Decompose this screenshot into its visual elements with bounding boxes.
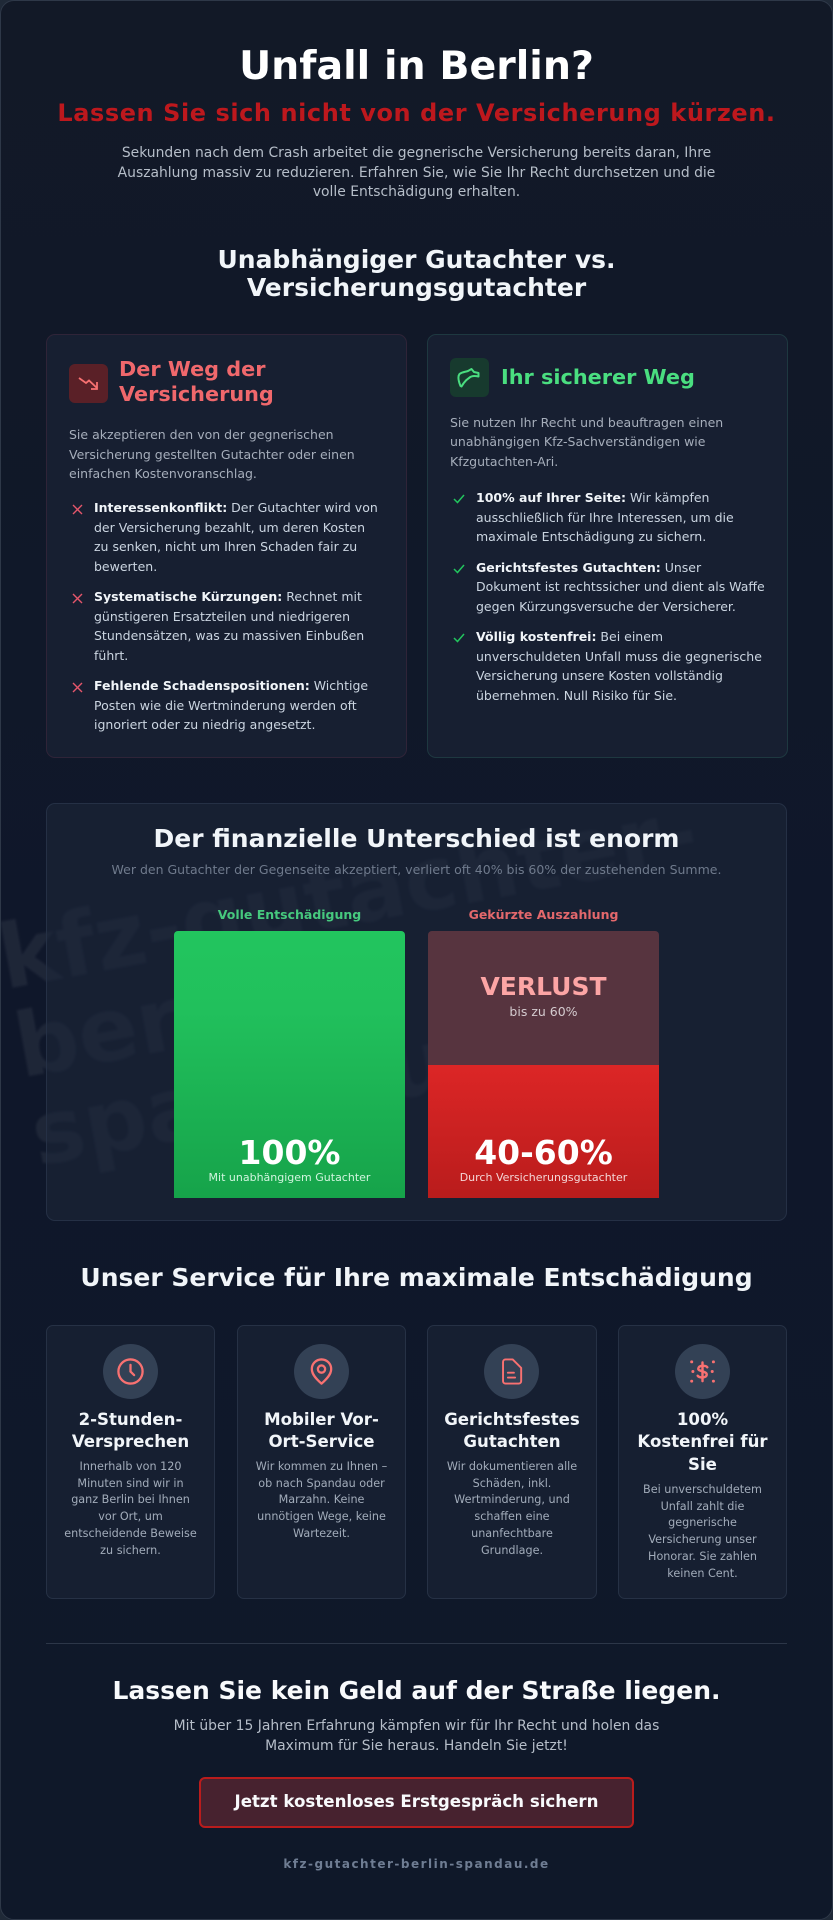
value: loss: VERLUST (480, 972, 607, 1001)
intro text: volle Entschädigung erhalten. (313, 184, 520, 200)
description: safe path: Sie nutzen Ihr Recht und beauftragen einen (450, 414, 723, 430)
description: safe path: Kfzgutachten-Ari. (450, 454, 558, 468)
card text: Unfall zahlt die (661, 1500, 744, 1513)
item: free of charge: übernehmen. Null Risiko für Sie. (476, 688, 677, 702)
item: free of charge: unverschuldeten Unfall muss die gegnerische (476, 648, 762, 664)
item: conflict of interest: Interessenkonflikt: Der Gutachter wird von (94, 500, 378, 515)
footer url: kfz-gutachter-berlin-spandau.de (283, 1857, 550, 1871)
watermark (0, 779, 705, 1187)
intro text (118, 145, 715, 200)
card text: Minuten sind wir in (77, 1477, 184, 1490)
item: systematic cuts: führt. (94, 648, 128, 662)
financial subtext: Wer den Gutachter der Gegenseite akzeptiert, verliert oft 40% bis 60% der zustehenden Summe. (112, 862, 721, 877)
card title: 2-Stunden- (79, 1410, 182, 1429)
card text (64, 1460, 197, 1557)
card text: Wertminderung, und (454, 1493, 570, 1506)
icon: check 1 (454, 494, 464, 504)
item: systematic cuts: Stundensätzen, was zu massiven Einbußen (94, 628, 364, 643)
icon: document (484, 1344, 539, 1399)
card title (637, 1410, 768, 1474)
service card: free (618, 1325, 787, 1599)
card text: Wartezeit. (293, 1527, 350, 1540)
service card: 2 hours (46, 1325, 215, 1599)
watermark: spandau.de (23, 980, 611, 1187)
item: missing items: Fehlende Schadenspositionen: Wichtige (94, 678, 368, 693)
service heading: Unser Service für Ihre maximale Entschädigung (80, 1263, 753, 1292)
item: missing items (94, 678, 368, 732)
card text: Bei unverschuldetem (643, 1483, 762, 1496)
card title: Kostenfrei für (637, 1432, 768, 1451)
card title (72, 1410, 189, 1451)
heading: insurance path (119, 357, 274, 406)
call to action text (174, 1718, 659, 1754)
item: free of charge (476, 629, 762, 702)
item: missing items: Posten wie die Wertminderung werden oft (94, 698, 357, 712)
bar chart: reduced payout (428, 907, 659, 1198)
card text (256, 1460, 387, 1540)
bar label: full: Volle Entschädigung (218, 907, 361, 922)
intro text: Auszahlung massiv zu reduzieren. Erfahren Sie, wie Sie Ihr Recht durchsetzen und die (118, 164, 715, 180)
card title: Mobiler Vor- (264, 1410, 379, 1429)
item: free of charge: Versicherung unsere Kosten vollständig (476, 668, 723, 683)
description: insurance path: Versicherung gestellten Gutachter oder einen (69, 446, 355, 462)
icon: check 2 (454, 564, 464, 574)
subtitle: Lassen Sie sich nicht von der Versicherung kürzen. (57, 99, 776, 127)
card text: unnötigen Wege, keine (257, 1510, 386, 1523)
card text (643, 1483, 762, 1580)
description: safe path (450, 414, 723, 468)
icon: check 3 (454, 634, 464, 642)
card title: Ort-Service (268, 1432, 375, 1451)
bar label: reduced: Gekürzte Auszahlung (469, 907, 618, 922)
card title: Versprechen (72, 1432, 189, 1451)
item: on your side: ausschließlich für Ihre Interessen, um die (476, 510, 734, 524)
icon: map pin (294, 1344, 348, 1399)
bar chart: full compensation (174, 907, 405, 1198)
service card: court-proof (427, 1325, 597, 1599)
description: insurance path: Sie akzeptieren den von der gegnerischen (69, 427, 334, 442)
icon: cross 1 (72, 504, 82, 514)
item: systematic cuts (94, 589, 364, 662)
icon: cross 3 (72, 682, 82, 692)
service card: on-site (237, 1325, 406, 1599)
item: systematic cuts: günstigeren Ersatzteilen und niedrigeren (94, 608, 350, 624)
item: conflict of interest: der Versicherung bezahlt, um deren Kosten (94, 520, 365, 534)
panel: insurance path (46, 334, 407, 758)
card text: unanfechtbare (471, 1527, 553, 1540)
financial heading: Der finanzielle Unterschied ist enorm (154, 824, 679, 853)
value: 40-60%: 40-60% (474, 1133, 613, 1172)
icon: dollar sparkle (674, 1344, 730, 1399)
card text: entscheidende Beweise (64, 1527, 197, 1540)
card text: Grundlage. (481, 1544, 543, 1557)
comparison heading (217, 245, 616, 302)
comparison heading: Unabhängiger Gutachter vs. (217, 245, 616, 274)
item: systematic cuts: Systematische Kürzungen: Rechnet mit (94, 589, 362, 604)
call to action button: Jetzt kostenloses Erstgespräch sichern (234, 1792, 598, 1811)
card text: vor Ort, um (98, 1510, 163, 1523)
item: conflict of interest (94, 500, 378, 574)
icon: cross 2 (72, 594, 82, 604)
icon: rising arrow (450, 358, 489, 397)
panel: financial difference (46, 803, 787, 1221)
card text: Versicherung unser (648, 1533, 757, 1546)
card text: Schäden, inkl. (473, 1477, 551, 1490)
icon: trending down (69, 364, 108, 403)
heading: insurance path: Versicherung (119, 382, 274, 406)
item: court-proof report (476, 560, 765, 614)
title: Unfall in Berlin? (239, 43, 594, 89)
card text (447, 1460, 577, 1557)
description: safe path: unabhängigen Kfz-Sachverständigen wie (450, 434, 705, 449)
card text: zu sichern. (100, 1544, 161, 1557)
item: court-proof report: gegen Kürzungsversuche der Versicherer. (476, 598, 736, 614)
item: conflict of interest: zu senken, nicht um Ihren Schaden fair zu (94, 539, 357, 554)
card title (264, 1410, 379, 1451)
card text: Marzahn. Keine (279, 1493, 364, 1506)
list: safe path benefits (454, 490, 765, 702)
item: conflict of interest: bewerten. (94, 558, 157, 574)
bar segment: loss (428, 931, 659, 1065)
card title: Gutachten (463, 1432, 561, 1451)
card title: Sie (688, 1455, 717, 1474)
card title: Gerichtsfestes (444, 1410, 580, 1429)
card text: Wir kommen zu Ihnen – (256, 1460, 387, 1473)
item: on your side (476, 490, 734, 544)
call to action button (199, 1777, 634, 1828)
caption: with independent expert: Mit unabhängigem Gutachter (209, 1171, 370, 1184)
card text: Innerhalb von 120 (80, 1460, 181, 1473)
item: court-proof report: Dokument ist rechtssicher und dient als Waffe (476, 579, 765, 594)
item: on your side: 100% auf Ihrer Seite: Wir kämpfen (476, 490, 709, 505)
card text: Wir dokumentieren alle (447, 1460, 577, 1473)
call to action heading: Lassen Sie kein Geld auf der Straße liegen. (112, 1676, 721, 1705)
card text: ob nach Spandau oder (258, 1477, 385, 1490)
bar: 100 percent (174, 931, 405, 1198)
item: missing items: ignoriert oder zu niedrig angesetzt. (94, 717, 315, 732)
heading: safe path: Ihr sicherer Weg (501, 365, 695, 389)
item: on your side: maximale Entschädigung zu sichern. (476, 529, 706, 544)
caption: through insurance expert: Durch Versicherungsgutachter (460, 1171, 627, 1184)
card text: keinen Cent. (667, 1567, 738, 1580)
list: insurance drawbacks (72, 500, 378, 732)
card text: Honorar. Sie zahlen (648, 1550, 757, 1563)
heading: insurance path: Der Weg der (119, 357, 266, 381)
caption: up to 60%: bis zu 60% (509, 1004, 578, 1019)
call to action text: Mit über 15 Jahren Erfahrung kämpfen wir für Ihr Recht und holen das (174, 1718, 659, 1734)
description: insurance path: einfachen Kostenvoranschlag. (69, 466, 257, 481)
card text: gegnerische (668, 1516, 737, 1529)
value: 100%: 100% (239, 1133, 340, 1172)
call to action text: Maximum für Sie heraus. Handeln Sie jetzt! (265, 1738, 568, 1754)
comparison heading: Versicherungsgutachter (247, 272, 586, 302)
item: court-proof report: Gerichtsfestes Gutachten: Unser (476, 560, 701, 574)
card title: 100% (677, 1410, 728, 1429)
panel: safe path (427, 334, 788, 758)
bar segment: payout (428, 1065, 659, 1198)
card title (444, 1410, 580, 1451)
card text: schaffen eine (474, 1510, 550, 1523)
intro text: Sekunden nach dem Crash arbeitet die gegnerische Versicherung bereits daran, Ihre (122, 145, 711, 161)
description: insurance path (69, 427, 355, 481)
card text: ganz Berlin bei Ihnen (71, 1493, 190, 1506)
item: free of charge: Völlig kostenfrei: Bei einem (476, 629, 663, 644)
watermark: berlin- (7, 937, 346, 1098)
watermark: kfz-gutachter- (0, 779, 705, 1010)
icon: clock (102, 1344, 158, 1399)
